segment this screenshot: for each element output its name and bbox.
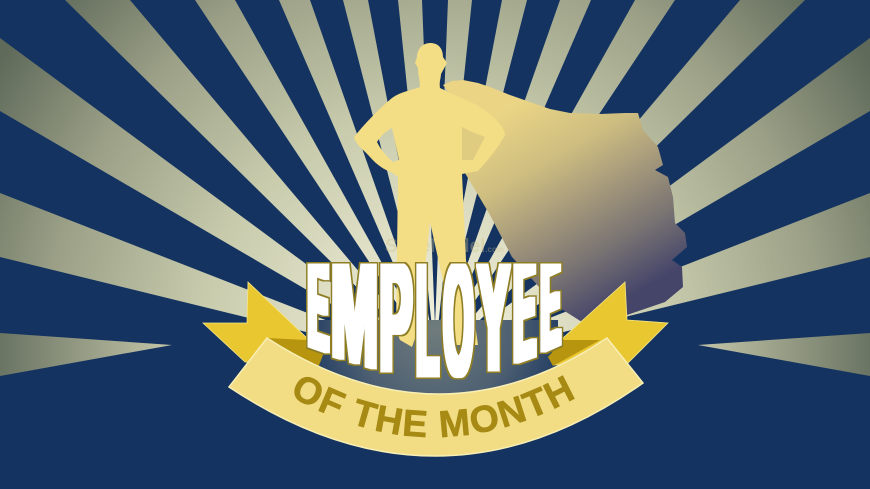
- EMPLOYEE headline: P: [380, 232, 412, 405]
- center glow: [312, 320, 558, 410]
- EMPLOYEE headline: [306, 262, 564, 380]
- EMPLOYEE headline: L: [416, 230, 438, 412]
- EMPLOYEE headline: E: [541, 228, 560, 379]
- banner text: OF THE MONTH: [294, 375, 575, 438]
- watermark: SlideModel.com: [385, 236, 504, 257]
- EMPLOYEE headline: E: [308, 230, 329, 380]
- main ribbon banner: [229, 338, 643, 456]
- superhero silhouette: [354, 43, 505, 347]
- right ribbon tail: [553, 282, 668, 365]
- left ribbon tail: [203, 282, 318, 367]
- left ribbon fold: [267, 338, 323, 368]
- EMPLOYEE headline: Y: [478, 232, 510, 404]
- right ribbon fold: [548, 340, 600, 366]
- EMPLOYEE headline: M: [331, 221, 378, 402]
- ray tip: lower left: [0, 333, 172, 376]
- superhero cape: [443, 80, 687, 322]
- arm gap showing cape: [462, 127, 485, 160]
- EMPLOYEE headline: E: [514, 226, 536, 395]
- ray tip: lower right: [698, 333, 870, 376]
- sunburst rays: [0, 0, 870, 385]
- EMPLOYEE headline: O: [444, 229, 474, 409]
